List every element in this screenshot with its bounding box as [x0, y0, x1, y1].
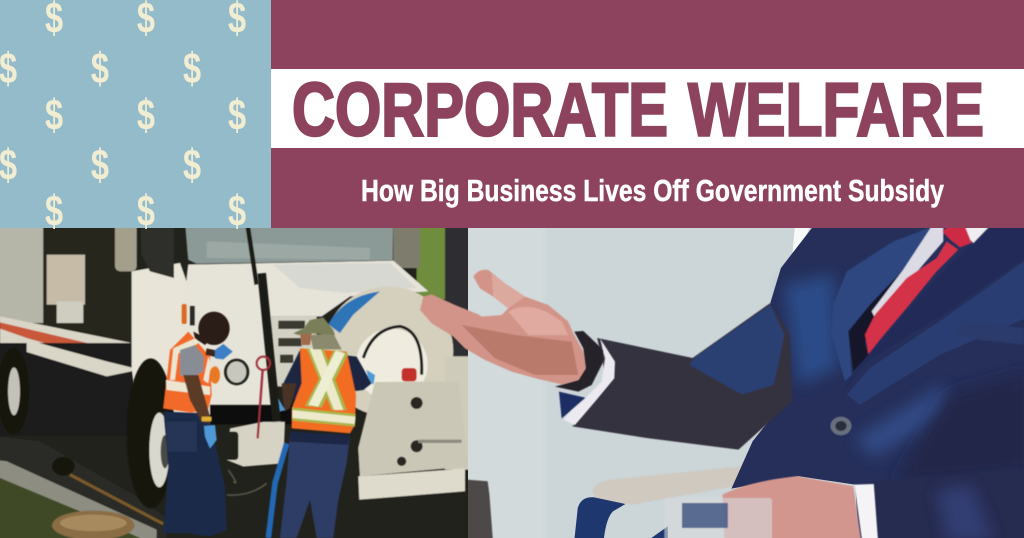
- blue hose: [268, 443, 287, 538]
- red hook tool: [257, 357, 270, 438]
- panel: pale blue dollar sign pattern: $: [228, 187, 246, 236]
- worker left: [163, 312, 233, 537]
- photo: businessman in suit gesturing: [420, 215, 1024, 538]
- panel: pale blue dollar sign pattern: $: [228, 91, 246, 140]
- black pole: [262, 273, 277, 422]
- headlight: [224, 359, 249, 385]
- panel: white title band: [271, 69, 1024, 148]
- chest, lapels, shirt and red tie: [832, 225, 1024, 405]
- pale wall background: [468, 228, 857, 538]
- panel: pale blue dollar sign pattern: $: [91, 45, 109, 94]
- photo: sewer truck and two workers: [0, 228, 468, 538]
- raised hand, watch and shirt cuff: [420, 270, 615, 425]
- worker right: [278, 317, 375, 538]
- panel: pale blue dollar sign pattern: [0, 0, 271, 236]
- suit jacket: [731, 225, 1024, 538]
- title: [292, 68, 984, 152]
- suit sleeve: [572, 303, 852, 450]
- title: CORPORATE: [292, 68, 668, 152]
- panel: maroon header background: [271, 0, 1024, 228]
- front wheel: [127, 358, 175, 508]
- truck turn signal and grille details: [182, 304, 195, 325]
- panel: pale blue dollar sign pattern: $: [91, 141, 109, 190]
- panel: pale blue dollar sign pattern: $: [137, 187, 155, 236]
- panel: pale blue dollar sign pattern: $: [45, 187, 63, 236]
- bumper and pump machinery: [218, 422, 285, 495]
- panel: pale blue dollar sign pattern: $: [183, 45, 201, 94]
- lower hand holding glass, cuff: [664, 476, 878, 538]
- panel: pale blue dollar sign pattern: $: [137, 91, 155, 140]
- panel: pale blue dollar sign pattern: $: [45, 91, 63, 140]
- panel: pale blue dollar sign pattern: $: [183, 141, 201, 190]
